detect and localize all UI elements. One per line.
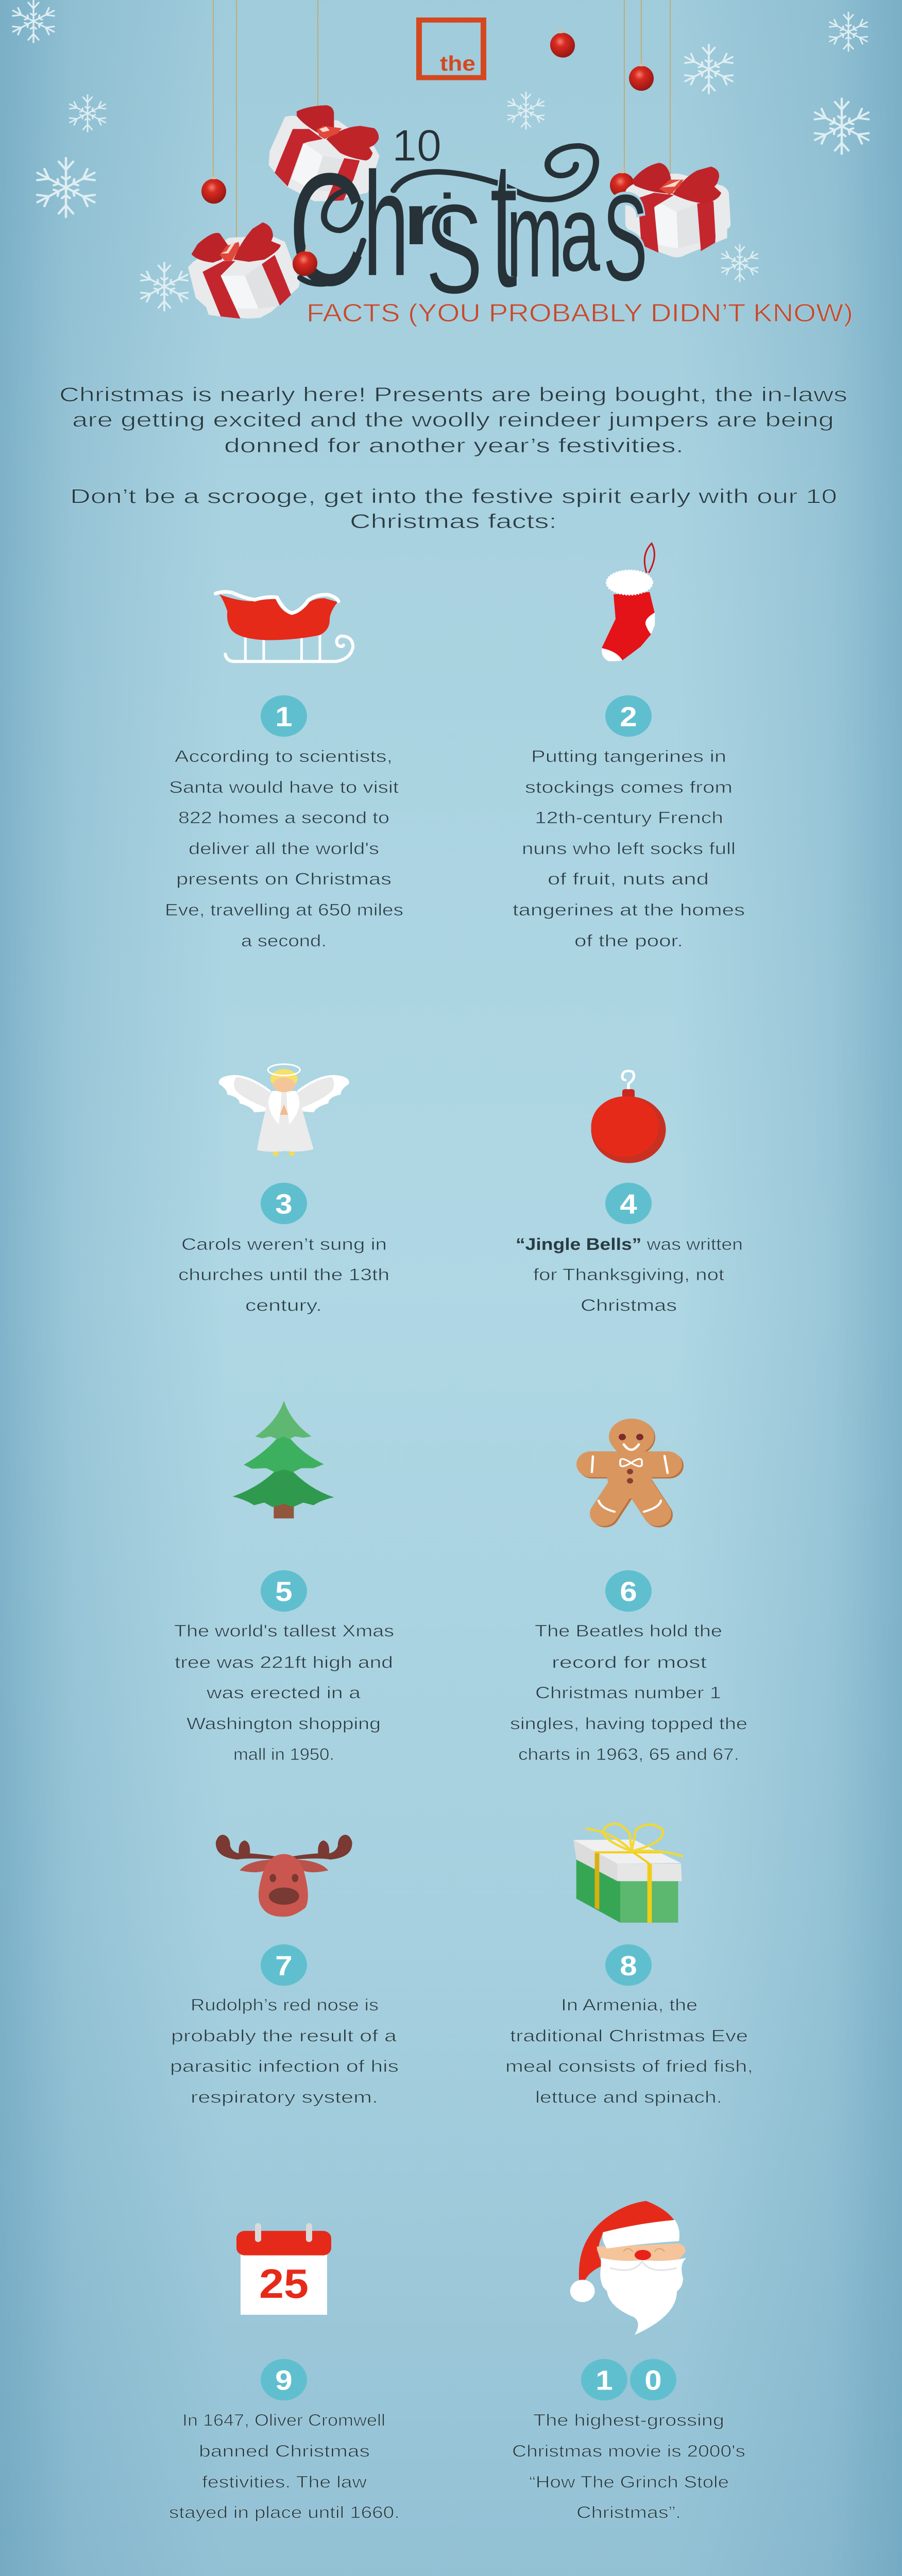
- text: fact 4: [516, 1235, 743, 1315]
- ornament over title: [291, 244, 320, 277]
- text: fact 7: Rudolph’s red nose is: [191, 1996, 379, 2014]
- text: fact 6: singles, having topped the: [510, 1715, 747, 1733]
- panel: fact 5: [174, 1401, 394, 1764]
- text: fact 2: of fruit, nuts and: [548, 870, 709, 889]
- intro text: donned for another year’s festivities.: [224, 434, 684, 457]
- title flourishes: [300, 146, 596, 284]
- text: fact 8: meal consists of fried fish,: [505, 2057, 753, 2076]
- badge: 8: [605, 1944, 652, 1986]
- text: fact 5: mall in 1950.: [233, 1745, 334, 1764]
- badge: 6: 6: [620, 1577, 637, 1607]
- intro text: Don’t be a scrooge, get into the festive spirit early with our 10: [70, 485, 837, 507]
- badge: 3: [261, 1183, 307, 1224]
- icon: angel: [219, 1064, 349, 1156]
- panel: fact 4: [516, 1071, 743, 1315]
- title word: s: [603, 133, 649, 316]
- text: fact 5: was erected in a: [206, 1684, 361, 1702]
- text: fact 5: [174, 1622, 394, 1764]
- text: fact 4: Christmas: [581, 1296, 677, 1315]
- text: fact 5: The world's tallest Xmas: [174, 1622, 394, 1640]
- text: fact 3: churches until the 13th: [178, 1266, 389, 1284]
- intro text: [59, 383, 847, 532]
- badge: 5: [261, 1570, 307, 1612]
- title word: C: [288, 140, 366, 319]
- text: fact 6: The Beatles hold the: [535, 1622, 722, 1640]
- text: fact 2: tangerines at the homes: [513, 901, 745, 920]
- icon: stocking: [602, 544, 655, 662]
- text: fact 6: [510, 1622, 747, 1764]
- icon: calendar: 25: [259, 2261, 309, 2307]
- text: fact 9: stayed in place until 1660.: [169, 2503, 400, 2522]
- text: fact 10: Christmas”.: [576, 2503, 681, 2522]
- icon: tree: [233, 1401, 334, 1518]
- text: fact 10: “How The Grinch Stole: [529, 2473, 729, 2492]
- panel: fact 10: [512, 2201, 745, 2522]
- badge: 10: [581, 2359, 676, 2400]
- title word: m: [506, 166, 563, 302]
- panel: fact 9: [169, 2223, 400, 2522]
- badge: 4: [605, 1183, 652, 1224]
- badge: 7: [261, 1944, 307, 1986]
- text: fact 7: probably the result of a: [171, 2027, 397, 2045]
- badge: 6: [605, 1570, 652, 1612]
- text: fact 7: [170, 1996, 399, 2107]
- text: fact 1: deliver all the world's: [189, 840, 379, 858]
- ornaments: [201, 26, 654, 204]
- text: fact 9: banned Christmas: [199, 2442, 370, 2461]
- text: fact 6: record for most: [552, 1653, 707, 1672]
- panel: fact 6: [510, 1419, 747, 1764]
- text: fact 2: Putting tangerines in: [531, 748, 726, 766]
- text: fact 10: Christmas movie is 2000's: [512, 2442, 745, 2461]
- title word: h: [363, 142, 409, 307]
- icon: green gift: [573, 1824, 683, 1923]
- text: fact 4: “Jingle Bells” was written: [516, 1235, 743, 1254]
- badge: 3: 3: [275, 1189, 293, 1220]
- title word: s: [425, 140, 484, 330]
- panel: fact 3: [178, 1064, 389, 1315]
- badge: 1: 1: [275, 701, 293, 733]
- text: fact 1: presents on Christmas: [176, 870, 392, 889]
- subtitle: FACTS (YOU PROBABLY DIDN’T KNOW): [307, 299, 853, 328]
- text: fact 3: Carols weren’t sung in: [181, 1235, 387, 1254]
- text: fact 1: a second.: [241, 932, 327, 950]
- text: fact 5: Washington shopping: [186, 1715, 381, 1733]
- text: fact 8: [505, 1996, 753, 2107]
- logo: the: [440, 52, 475, 75]
- gift: top left: [269, 105, 380, 201]
- gift: right: [625, 163, 730, 257]
- text: fact 2: [513, 748, 745, 950]
- text: fact 6: charts in 1963, 65 and 67.: [518, 1745, 739, 1764]
- badge: 2: 2: [620, 701, 637, 733]
- intro text: are getting excited and the woolly reindeer jumpers are being: [72, 408, 834, 431]
- snowflakes: [10, 0, 872, 311]
- gift: bottom left: [188, 223, 300, 319]
- text: fact 7: parasitic infection of his: [170, 2057, 399, 2076]
- badge: 7: 7: [275, 1951, 293, 1981]
- badge: 9: 9: [275, 2365, 293, 2396]
- text: fact 2: nuns who left socks full: [522, 840, 736, 858]
- intro text: Christmas is nearly here! Presents are being bought, the in-laws: [59, 383, 847, 405]
- text: fact 4: for Thanksgiving, not: [533, 1266, 725, 1284]
- text: fact 2: of the poor.: [574, 932, 683, 950]
- badge: 10: 1: [595, 2365, 613, 2396]
- text: fact 8: lettuce and spinach.: [535, 2088, 722, 2107]
- badge: 2: [605, 695, 652, 737]
- text: fact 3: century.: [245, 1296, 322, 1315]
- badge: 1: [261, 695, 307, 737]
- icon: reindeer: [216, 1835, 352, 1917]
- icon: gingerbread man: [591, 1419, 669, 1515]
- badge: 8: 8: [620, 1951, 637, 1981]
- text: fact 1: [165, 748, 403, 950]
- badge: 5: 5: [275, 1577, 293, 1607]
- text: fact 8: traditional Christmas Eve: [510, 2027, 748, 2045]
- text: fact 3: [178, 1235, 389, 1315]
- icon: calendar: [236, 2223, 331, 2315]
- title: Christmas: [288, 121, 649, 330]
- text: fact 9: festivities. The law: [202, 2473, 367, 2492]
- badge: 10: 0: [644, 2365, 662, 2396]
- text: fact 2: stockings comes from: [525, 778, 733, 797]
- text: fact 9: In 1647, Oliver Cromwell: [182, 2411, 385, 2430]
- title word: r: [403, 179, 440, 260]
- title word: a: [560, 173, 601, 293]
- panel: fact 2: [513, 544, 745, 950]
- text: fact 8: In Armenia, the: [561, 1996, 697, 2014]
- text: fact 1: Santa would have to visit: [169, 778, 399, 797]
- title word: t: [489, 121, 518, 327]
- text: fact 2: 12th-century French: [535, 809, 723, 827]
- text: fact 6: Christmas number 1: [535, 1684, 721, 1702]
- panel: fact 8: [505, 1824, 753, 2107]
- badge: 9: [261, 2359, 307, 2400]
- icon: sleigh: [215, 592, 353, 662]
- icon: santa: [570, 2201, 686, 2335]
- text: fact 5: tree was 221ft high and: [175, 1653, 393, 1672]
- text: fact 7: respiratory system.: [191, 2088, 378, 2107]
- text: fact 10: [512, 2411, 745, 2522]
- badge: 4: 4: [620, 1189, 637, 1220]
- title word: i: [440, 181, 454, 250]
- text: fact 9: [169, 2411, 400, 2522]
- text: fact 1: 822 homes a second to: [178, 809, 389, 827]
- text: fact 1: According to scientists,: [175, 748, 393, 766]
- text: fact 10: The highest-grossing: [533, 2411, 724, 2430]
- text: fact 1: Eve, travelling at 650 miles: [165, 901, 403, 920]
- panel: fact 7: [170, 1835, 399, 2107]
- hanging strings: [213, 0, 670, 244]
- intro text: Christmas facts:: [350, 510, 557, 532]
- icon: bauble: [591, 1071, 666, 1163]
- panel: fact 1: [165, 592, 403, 950]
- title: 10: 10: [392, 122, 441, 171]
- logo: [419, 20, 483, 78]
